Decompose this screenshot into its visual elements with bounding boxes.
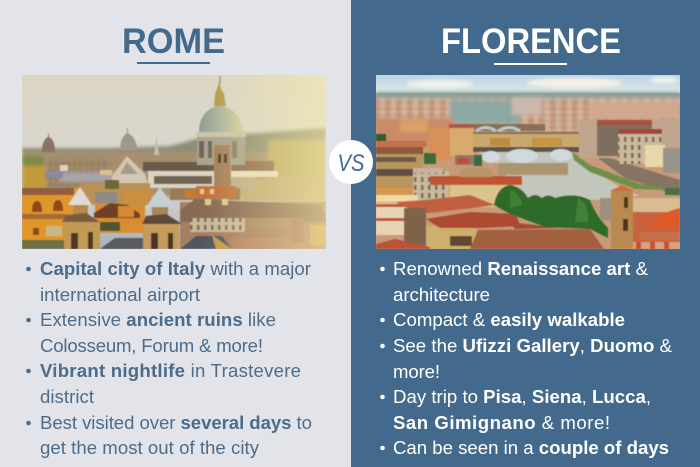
small domes xyxy=(42,134,55,152)
left building xyxy=(376,154,424,188)
panel: Rome background xyxy=(0,0,351,467)
bullet: day trips: Day trip to Pisa, Siena, Lucca, xyxy=(393,386,651,407)
bullet: couple of days: Can be seen in a couple of days xyxy=(393,437,669,458)
right of tower xyxy=(633,198,680,212)
orange left block xyxy=(22,188,80,240)
lower roofs background xyxy=(80,183,150,205)
distant bridge xyxy=(473,124,545,131)
bullet: ancient ruins xyxy=(26,309,276,356)
roof foreground xyxy=(470,229,604,249)
right bank wall xyxy=(598,158,680,196)
bullet: capital city: international airport xyxy=(40,284,201,305)
green riverbank xyxy=(572,152,672,190)
bullet list: Florence xyxy=(380,258,673,458)
bullet: day trips: San Gimignano & more! xyxy=(393,412,610,433)
bullet: Ufizzi and Duomo: more! xyxy=(393,361,440,382)
buildings left of bridge xyxy=(449,124,474,156)
bullet: Ufizzi and Duomo xyxy=(380,335,673,382)
panel: Florence background xyxy=(351,0,700,467)
bullet: renaissance: architecture xyxy=(393,284,490,305)
river xyxy=(478,152,640,200)
photo: Florence with Ponte Vecchio xyxy=(376,75,680,249)
trees xyxy=(494,185,608,238)
bullet: nightlife: district xyxy=(40,386,95,407)
big dome xyxy=(197,135,245,165)
bullet: nightlife: Vibrant nightlife in Trastevere xyxy=(40,360,301,381)
badge: VS xyxy=(329,140,373,184)
photo: Rome skyline xyxy=(22,75,326,249)
tower xyxy=(611,190,633,249)
bullet: renaissance: Renowned Renaissance art & xyxy=(393,258,649,279)
heading: Florence: FLORENCE xyxy=(441,22,621,61)
bullet: capital city: Capital city of Italy with a major xyxy=(40,258,311,279)
right bank buildings xyxy=(579,120,680,158)
bullet: several days xyxy=(26,412,312,458)
heading: Rome: ROME xyxy=(122,22,225,61)
bullet: several days: get the most out of the city xyxy=(40,437,260,458)
badge: VS: VS xyxy=(338,150,364,177)
mid rooftops xyxy=(376,188,414,203)
bullet: ancient ruins: Extensive ancient ruins like xyxy=(40,309,276,330)
red buildings xyxy=(632,212,680,242)
bullet: ancient ruins: Colosseum, Forum & more! xyxy=(40,335,263,356)
center orange xyxy=(95,205,145,233)
bullet: capital city xyxy=(26,258,311,305)
bullet: several days: Best visited over several days to xyxy=(40,412,312,433)
bullet: renaissance xyxy=(380,258,649,305)
bullet: Ufizzi and Duomo: See the Ufizzi Gallery, Duomo & xyxy=(393,335,673,356)
bullet: day trips xyxy=(380,386,651,433)
right tower xyxy=(146,187,168,208)
bullet: walkable: Compact & easily walkable xyxy=(393,309,625,330)
bullet list: Rome xyxy=(26,258,312,458)
Ponte Vecchio xyxy=(474,134,579,148)
right lower buildings xyxy=(180,202,326,249)
main church xyxy=(112,156,148,184)
bullet: nightlife xyxy=(26,360,301,407)
left tower xyxy=(68,187,92,205)
